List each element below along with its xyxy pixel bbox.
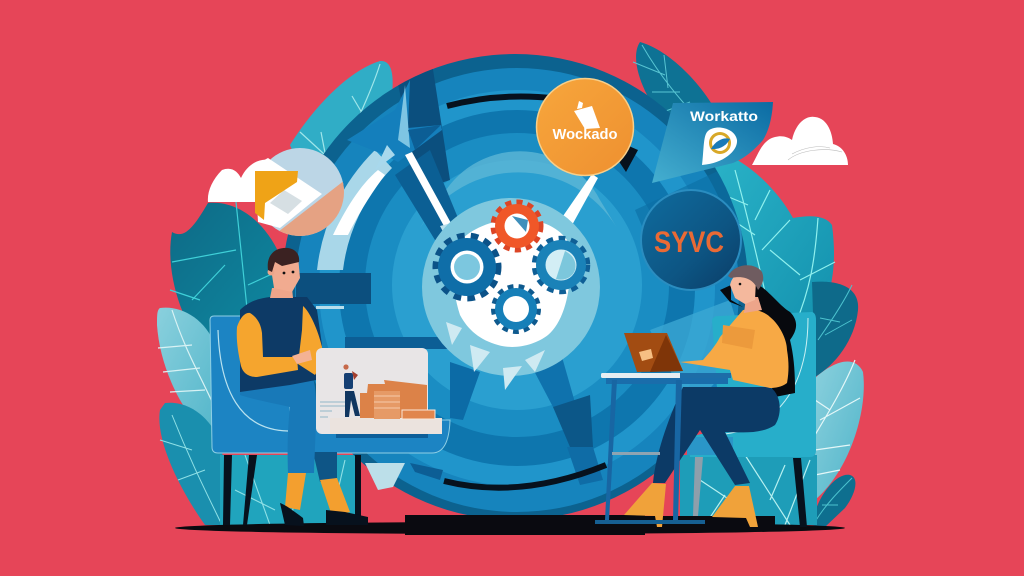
person: man with chair bbox=[210, 248, 450, 526]
badge: Wockado orange circle bbox=[536, 78, 634, 176]
leaf: bottom left bbox=[159, 403, 230, 525]
banner: Workatto bbox=[652, 102, 773, 183]
white connector to orange badge bbox=[552, 174, 598, 236]
chair bbox=[688, 312, 816, 457]
leaf: upper left light teal bbox=[290, 61, 393, 185]
leaf: bottom right dark bbox=[812, 475, 855, 527]
sleeves bbox=[237, 313, 298, 377]
leaf: teal under chair bbox=[680, 455, 817, 525]
central radial disc bbox=[282, 50, 748, 520]
chair legs bbox=[793, 458, 807, 527]
ankles and boots bbox=[624, 483, 666, 527]
worker bbox=[343, 364, 360, 417]
torso bbox=[240, 297, 322, 392]
trousers bbox=[653, 387, 780, 485]
gear: blue right bbox=[535, 239, 587, 291]
back hair bbox=[745, 282, 796, 397]
sweater bbox=[680, 309, 788, 388]
hair bbox=[268, 248, 299, 272]
leaf: left light bbox=[157, 308, 222, 440]
rear leg bbox=[313, 452, 337, 482]
leaves: left group bbox=[157, 61, 393, 525]
gear: orange top bbox=[494, 202, 540, 250]
banner: Workatto: Workatto bbox=[690, 109, 758, 124]
neck and head bbox=[270, 288, 293, 298]
star pinwheel bbox=[333, 80, 460, 245]
cloud: right bbox=[752, 117, 848, 165]
cloud: left bbox=[208, 160, 270, 202]
badge: Wockado orange circle: Wockado bbox=[552, 126, 618, 143]
radial wedges bbox=[383, 50, 745, 520]
leaves: right group bbox=[633, 42, 864, 527]
badge: SYVC navy circle bbox=[641, 190, 741, 290]
chair bbox=[210, 316, 450, 453]
leaf: right light bbox=[815, 360, 864, 500]
leaf: left dark teal bbox=[170, 202, 292, 350]
black arcs bbox=[447, 96, 590, 106]
badge: left circle with arrow bbox=[208, 148, 345, 240]
hand bbox=[292, 350, 312, 364]
gear: blue bottom bbox=[494, 287, 538, 331]
table bbox=[595, 373, 731, 524]
ankles bbox=[285, 473, 350, 516]
badge: SYVC navy circle: SYVC bbox=[654, 226, 724, 259]
icon: location pin logo bbox=[702, 128, 737, 165]
horizontal dark bar bbox=[296, 273, 371, 304]
ring segment: pale band bbox=[317, 150, 392, 270]
leaf: right dark bbox=[812, 282, 858, 377]
chair legs bbox=[223, 455, 361, 525]
laptop bbox=[624, 333, 683, 372]
leaf: right large teal bbox=[710, 150, 835, 340]
person: woman with chair bbox=[595, 265, 816, 527]
illustration bbox=[157, 42, 864, 535]
boxes bbox=[360, 380, 435, 419]
shoes bbox=[280, 503, 368, 526]
ground shadow bbox=[175, 515, 845, 535]
gear hub bbox=[422, 198, 600, 390]
neck and head bbox=[744, 297, 762, 313]
leaf: top right dark bbox=[633, 42, 725, 140]
gear: large blue left bbox=[436, 236, 498, 298]
card: warehouse boxes photo bbox=[316, 348, 442, 438]
trousers bbox=[240, 375, 316, 473]
leaf: lower teal behind chair bbox=[220, 455, 360, 525]
